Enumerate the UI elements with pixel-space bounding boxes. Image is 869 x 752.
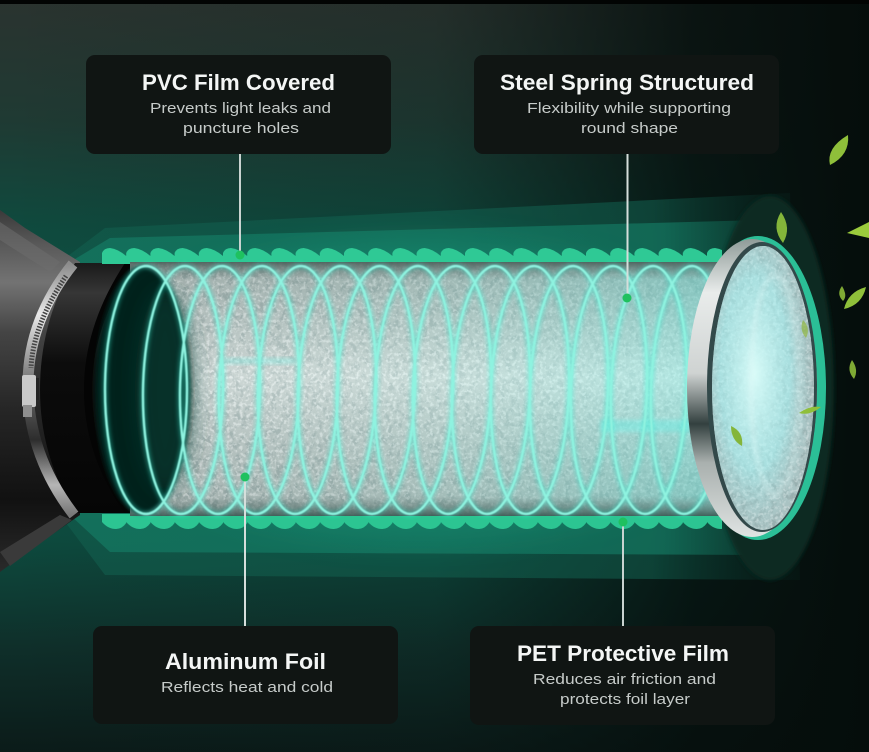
panel: Steel Spring Structured [474,55,779,154]
leaves [731,135,869,446]
steel spring coils [105,265,729,515]
description: PET: Reduces air friction and [533,671,716,688]
heading: Aluminum Foil: Aluminum Foil [165,649,326,674]
description: Aluminum Foil: Reflects heat and cold [161,679,333,696]
panel: PVC Film Covered [86,55,391,154]
connector line and dot: PET film [618,518,628,626]
panel: PET Protective Film [470,626,775,725]
description: PVC [150,100,331,137]
ruffled green PET film edges [102,246,722,532]
description: PET [533,671,716,708]
coil glow [105,265,729,515]
description: PVC: Prevents light leaks and [150,100,331,117]
heading: PET: PET Protective Film [517,641,729,666]
description: Steel Spring: round shape [581,120,678,137]
backdrop: perspective glow bands behind duct [60,193,800,580]
heading: PVC: PVC Film Covered [142,70,335,95]
dark inner opening at connector end [95,266,195,514]
connector line and dot: steel spring [622,154,632,302]
coil lines [105,265,729,515]
connector line and dot: PVC film [236,154,244,260]
aluminum foil core [130,262,730,516]
dark halo behind duct opening [706,196,834,580]
duct opening with rim [687,236,826,540]
description: PVC: puncture holes [183,120,299,137]
description: Steel Spring: Flexibility while supporting [527,100,731,117]
heading: Steel Spring: Steel Spring Structured [500,70,754,95]
panel: Aluminum Foil [93,626,398,724]
black rubber collar [40,263,135,513]
steel hose clamp [22,264,74,515]
funnel connector [0,210,80,572]
connector line and dot: aluminum foil [240,472,250,626]
description: Steel Spring [527,100,731,137]
description: PET: protects foil layer [560,691,690,708]
